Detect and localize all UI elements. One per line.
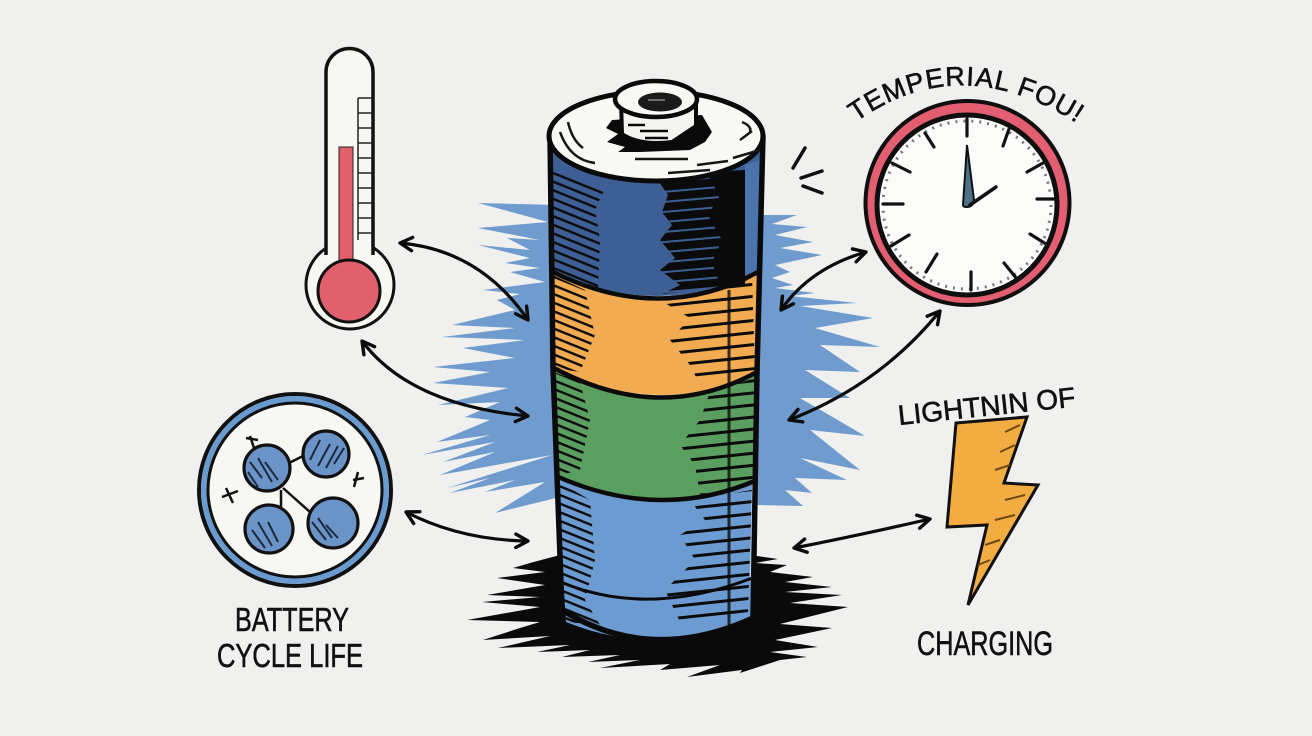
battery band: green [554,368,757,499]
arrow: cells [406,512,528,541]
icon: thermometer [306,48,394,329]
label: battery cycle life [217,601,363,674]
battery band: dark blue [551,140,763,296]
arrows [362,243,940,548]
label: temperial fou: TEMPERIAL FOU! [846,66,1084,122]
dark right shading of top band [655,176,745,294]
battery outline and band lines [550,135,763,640]
arrow: clock upper [781,252,866,310]
battery band: light blue [556,476,757,640]
icon: cells circle [199,394,391,586]
side highlights [745,160,760,282]
label: lightnin of: LIGHTNIN OF [896,382,1077,431]
battery band: orange [553,272,758,395]
icon: clock [864,99,1072,307]
battery terminal [615,81,697,143]
arrow: lightning [794,519,930,548]
label: battery cycle life: BATTERY [235,601,349,638]
battery [549,81,763,640]
arrow: clock lower [789,311,940,420]
blue splash behind battery [422,203,880,513]
motion marks near clock [793,148,822,193]
terminal shadow [606,115,712,152]
right hatching [660,275,755,622]
battery top cap [549,91,763,181]
left hatching [553,168,605,625]
icon: lightning bolt [947,417,1038,605]
arrow: thermometer upper [400,243,528,320]
arrow: thermometer lower [362,341,528,416]
label: charging: CHARGING [917,625,1053,663]
black scribble shadow at battery base [467,555,848,677]
label: battery cycle life: CYCLE LIFE [217,637,363,674]
